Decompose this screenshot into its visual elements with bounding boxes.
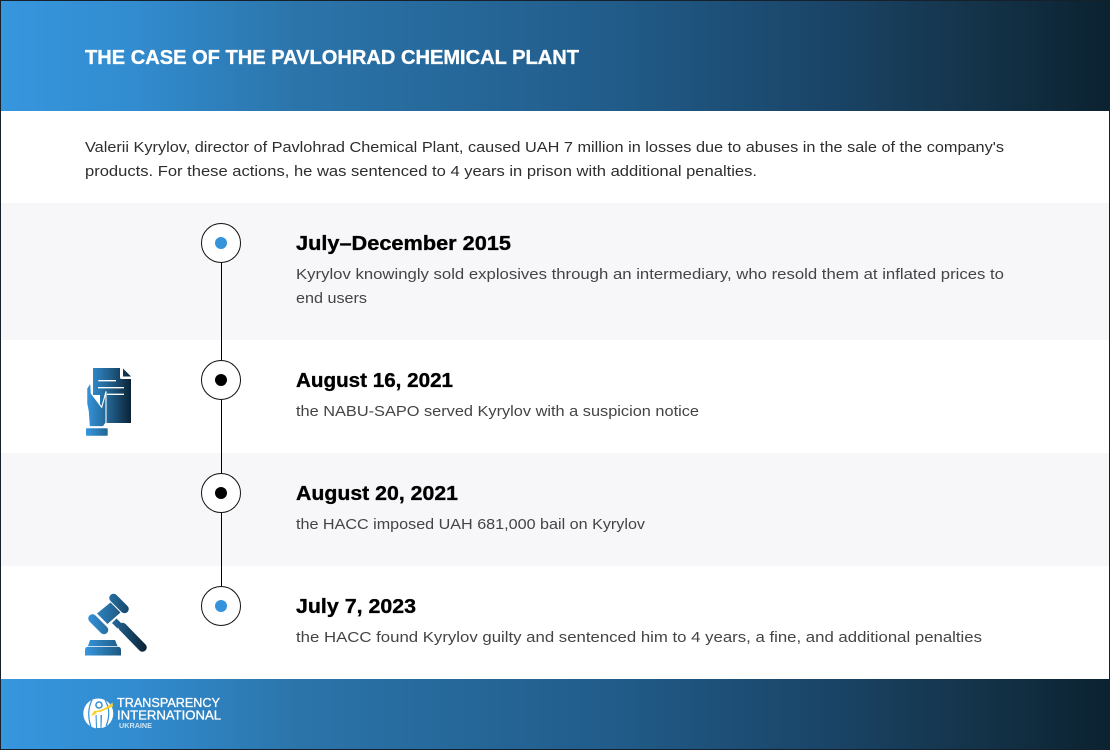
event 1: Kyrylov knowingly sold explosives through an intermediary, who resold them at inflated prices to: [296, 266, 1004, 283]
event 1: [296, 232, 1004, 307]
event 4: July 7, 2023: [296, 595, 416, 618]
event 3: [296, 482, 646, 533]
event 4: the HACC found Kyrylov guilty and sentenced him to 4 years, a fine, and additional penalties: [296, 629, 982, 646]
event 2: [296, 369, 699, 420]
intro text: [85, 139, 1004, 180]
event 3: the HACC imposed UAH 681,000 bail on Kyrylov: [296, 516, 646, 533]
timeline marker 2: [202, 360, 240, 400]
timeline marker 1: [202, 224, 240, 262]
footer band: [0, 679, 1110, 750]
intro text: Valerii Kyrylov, director of Pavlohrad Chemical Plant, caused UAH 7 million in losses due to abuses in the sale of the company's: [85, 139, 1004, 156]
row background: August 20, 2021: [0, 453, 1110, 566]
Transparency International Ukraine logo: INTERNATIONAL: [117, 708, 221, 722]
Transparency International Ukraine logo: UKRAINE: [119, 723, 152, 730]
Transparency International Ukraine logo: TRANSPARENCY: [117, 695, 220, 710]
timeline marker 3: [202, 474, 240, 512]
Transparency International Ukraine logo: [83, 695, 221, 730]
icon: judge's gavel: [85, 598, 142, 656]
timeline marker 4: [202, 586, 240, 626]
title: THE CASE OF THE PAVLOHRAD CHEMICAL PLANT: [85, 47, 579, 69]
icon: hand holding document: [86, 368, 131, 436]
event 1: July–December 2015: [296, 232, 511, 255]
event 4: [296, 595, 982, 646]
intro text: products. For these actions, he was sentenced to 4 years in prison with additional penalties.: [85, 163, 757, 180]
event 2: the NABU-SAPO served Kyrylov with a suspicion notice: [296, 403, 699, 420]
event 1: end users: [296, 290, 367, 307]
row background: July–December 2015: [0, 203, 1110, 340]
event 3: August 20, 2021: [296, 482, 458, 505]
event 2: August 16, 2021: [296, 369, 453, 392]
header band: [0, 0, 1110, 111]
timeline line: [221, 262, 222, 587]
